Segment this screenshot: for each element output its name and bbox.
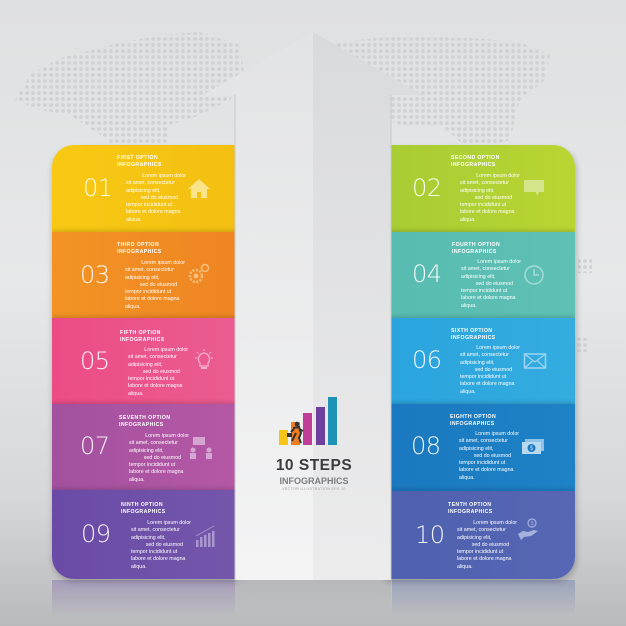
row 09: NINTH OPTION: [121, 502, 163, 508]
row 09: 09: [81, 520, 111, 548]
row 03: THIRD OPTION: [117, 242, 159, 248]
row 08: sit amet, consectetur: [459, 438, 508, 444]
row 06: Lorem ipsum dolor: [476, 345, 520, 351]
row 05: adipisicing elit,: [128, 362, 162, 368]
row 06: INFOGRAPHICS: [451, 335, 496, 341]
row 10: 10: [415, 521, 445, 549]
icon: growth chart: [196, 526, 214, 547]
row 09: [81, 502, 214, 570]
icon: hand with coin: [518, 518, 538, 540]
row 03: [80, 242, 210, 310]
row 05: 05: [80, 347, 110, 375]
row 02: tempor incididunt ut: [460, 202, 506, 208]
row 01: FIRST OPTION: [117, 155, 158, 161]
row 07: aliqua.: [129, 477, 145, 483]
row 03: 03: [80, 261, 110, 289]
row 04: FOURTH OPTION: [452, 242, 500, 248]
row 03: tempor incididunt ut: [125, 289, 171, 295]
row 03: aliqua.: [125, 304, 141, 310]
row 02: labore et dolore magna: [460, 209, 514, 215]
row 01: labore et dolore magna: [126, 209, 180, 215]
row 05: aliqua.: [128, 391, 144, 397]
row 10: INFOGRAPHICS: [448, 509, 493, 515]
row 02: SECOND OPTION: [451, 155, 500, 161]
row 08: tempor incididunt ut: [459, 460, 505, 466]
row 09: Lorem ipsum dolor: [147, 520, 191, 526]
row 04: 04: [412, 260, 442, 288]
row 06: tempor incididunt ut: [460, 374, 506, 380]
row 05: FIFTH OPTION: [120, 330, 161, 336]
subtitle: INFOGRAPHICS: [279, 476, 348, 486]
row 02: sed do eiusmod: [475, 195, 512, 201]
row 02: 02: [412, 174, 442, 202]
row 03: sed do eiusmod: [140, 282, 177, 288]
row 07: [80, 415, 212, 483]
row 09: adipisicing elit,: [131, 535, 165, 541]
row 02: [412, 155, 544, 223]
row 07: sit amet, consectetur: [129, 440, 178, 446]
row 05: labore et dolore magna: [128, 383, 182, 389]
row 03: INFOGRAPHICS: [117, 249, 162, 255]
row 02: INFOGRAPHICS: [451, 162, 496, 168]
row 05: sed do eiusmod: [143, 369, 180, 375]
row 02: sit amet, consectetur: [460, 180, 509, 186]
row 04: [412, 242, 544, 309]
row 01: Lorem ipsum dolor: [142, 173, 186, 179]
row 06: labore et dolore magna: [460, 381, 514, 387]
row 01: sed do eiusmod: [141, 195, 178, 201]
icon: envelope: [524, 353, 546, 369]
row 05: INFOGRAPHICS: [120, 337, 165, 343]
row 07: 07: [80, 432, 110, 460]
row 07: sed do eiusmod: [144, 455, 181, 461]
icon: speech bubble: [524, 180, 544, 196]
row 06: sit amet, consectetur: [460, 352, 509, 358]
row 05: Lorem ipsum dolor: [144, 347, 188, 353]
row 03: adipisicing elit,: [125, 275, 159, 281]
icon: money: [522, 439, 544, 454]
row 06: sed do eiusmod: [475, 367, 512, 373]
icon: people talking: [190, 437, 212, 459]
row 03: Lorem ipsum dolor: [141, 260, 185, 266]
row 04: Lorem ipsum dolor: [477, 259, 521, 265]
title: 10 STEPS: 10 STEPS: [276, 457, 352, 474]
row 08: labore et dolore magna: [459, 467, 513, 473]
row 09: sed do eiusmod: [146, 542, 183, 548]
row 09: labore et dolore magna: [131, 556, 185, 562]
row 07: INFOGRAPHICS: [119, 422, 164, 428]
row 09: INFOGRAPHICS: [121, 509, 166, 515]
row 10: TENTH OPTION: [448, 502, 491, 508]
icon: gears: [188, 264, 210, 284]
row 10: sit amet, consectetur: [457, 527, 506, 533]
row 08: adipisicing elit,: [459, 446, 493, 452]
row 10: [415, 502, 538, 570]
row 04: tempor incididunt ut: [461, 288, 507, 294]
row 01: sit amet, consectetur: [126, 180, 175, 186]
row 04: labore et dolore magna: [461, 295, 515, 301]
logo: 10 steps: VECTOR ILLUSTRATION EPS 10: [282, 487, 346, 491]
row 10: labore et dolore magna: [457, 556, 511, 562]
row 06: aliqua.: [460, 389, 476, 395]
row 02: aliqua.: [460, 217, 476, 223]
panel: right options: [384, 145, 575, 579]
icon: hand with coin: $: [531, 521, 534, 527]
row 06: 06: [412, 346, 442, 374]
row 04: adipisicing elit,: [461, 274, 495, 280]
row 03: labore et dolore magna: [125, 296, 179, 302]
row 09: tempor incididunt ut: [131, 549, 177, 555]
row 06: [412, 328, 546, 395]
row 04: aliqua.: [461, 303, 477, 309]
row 01: [83, 155, 210, 223]
row 05: sit amet, consectetur: [128, 354, 177, 360]
row 08: sed do eiusmod: [474, 453, 511, 459]
row 07: adipisicing elit,: [129, 448, 163, 454]
row 10: sed do eiusmod: [472, 542, 509, 548]
row 05: [80, 330, 213, 397]
row 09: aliqua.: [131, 564, 147, 570]
row 07: SEVENTH OPTION: [119, 415, 170, 421]
row 07: Lorem ipsum dolor: [145, 433, 189, 439]
row 08: 08: [411, 432, 441, 460]
row 01: INFOGRAPHICS: [117, 162, 162, 168]
row 03: sit amet, consectetur: [125, 267, 174, 273]
row 08: INFOGRAPHICS: [450, 421, 495, 427]
icon: house: [188, 179, 210, 198]
row 08: [411, 414, 544, 481]
row 10: adipisicing elit,: [457, 535, 491, 541]
row 07: tempor incididunt ut: [129, 462, 175, 468]
row 10: Lorem ipsum dolor: [473, 520, 517, 526]
panel: left options: [52, 145, 237, 579]
icon: bulb: [195, 349, 213, 369]
row 01: adipisicing elit,: [126, 188, 160, 194]
row 10: tempor incididunt ut: [457, 549, 503, 555]
icon: clock: [524, 265, 544, 285]
reflections: [52, 580, 235, 616]
row 04: sed do eiusmod: [476, 281, 513, 287]
row 09: sit amet, consectetur: [131, 527, 180, 533]
row 06: adipisicing elit,: [460, 360, 494, 366]
icon: money: $: [530, 446, 534, 452]
row 04: sit amet, consectetur: [461, 266, 510, 272]
row 08: aliqua.: [459, 475, 475, 481]
row 05: tempor incididunt ut: [128, 376, 174, 382]
row 01: tempor incididunt ut: [126, 202, 172, 208]
row 08: Lorem ipsum dolor: [475, 431, 519, 437]
row 10: aliqua.: [457, 564, 473, 570]
row 01: aliqua.: [126, 217, 142, 223]
row 02: adipisicing elit,: [460, 188, 494, 194]
row 01: 01: [83, 174, 113, 202]
row 02: Lorem ipsum dolor: [476, 173, 520, 179]
row 08: EIGHTH OPTION: [450, 414, 496, 420]
row 07: labore et dolore magna: [129, 469, 183, 475]
row 06: SIXTH OPTION: [451, 328, 492, 334]
bar chart with runner: [279, 397, 337, 445]
row 04: INFOGRAPHICS: [452, 249, 497, 255]
logo: 10 steps: [276, 397, 352, 491]
